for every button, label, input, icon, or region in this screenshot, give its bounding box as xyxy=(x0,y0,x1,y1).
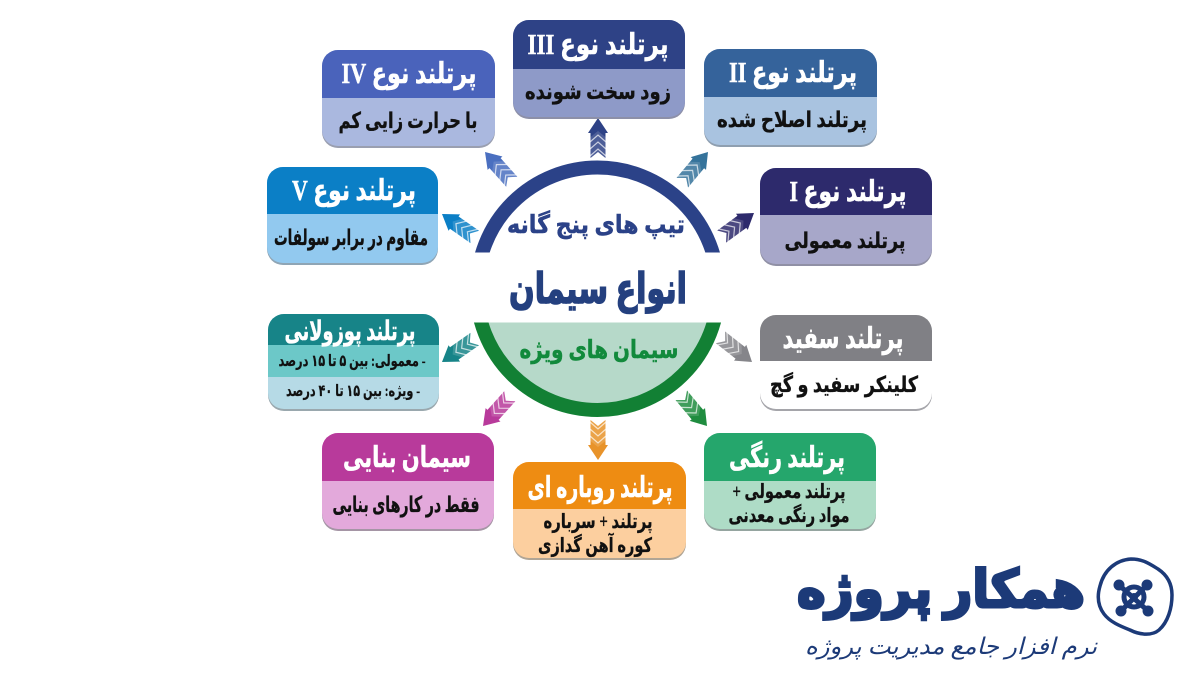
green half circle: special cements xyxy=(474,322,721,417)
panel: slag portland xyxy=(513,462,686,560)
panel: white portland: پرتلند سفید xyxy=(782,323,904,356)
logo name: همکار پروژه xyxy=(797,562,1085,620)
panel: slag portland: پرتلند + سرباره xyxy=(544,511,652,534)
panel: type IV: با حرارت زایی کم xyxy=(338,108,478,134)
panel: type IV: پرتلند نوع IV xyxy=(342,58,476,91)
arrow: to slag xyxy=(588,420,608,460)
panel: coloured portland: پرتلند معمولی + xyxy=(732,481,846,504)
arrow: to pozzolan xyxy=(436,331,481,370)
arrow: to coloured xyxy=(674,389,715,432)
panel: pozzolanic: - معمولی: بین ۵ تا ۱۵ درصد xyxy=(278,353,426,370)
panel: white portland: کلینکر سفید و گچ xyxy=(770,371,918,398)
arrow: to type IV xyxy=(478,145,519,188)
main title: انواع سیمان xyxy=(509,267,687,314)
panel: type III xyxy=(513,20,685,119)
panel: type III: پرتلند نوع III xyxy=(528,29,668,62)
panel: coloured portland: پرتلند رنگی xyxy=(729,440,845,475)
heading: special cements: سیمان های ویژه xyxy=(520,337,678,365)
panel: type V: پرتلند نوع V xyxy=(292,175,416,208)
logo: brand xyxy=(797,559,1172,660)
panel: coloured portland xyxy=(704,433,876,531)
panel: masonry cement: فقط در کارهای بنایی xyxy=(332,492,480,517)
panel: type II: پرتلند نوع II xyxy=(729,57,857,90)
blue arc: five types xyxy=(475,160,720,252)
logo tagline: نرم افزار جامع مدیریت پروژه xyxy=(805,634,1099,660)
panel: slag portland: کوره آهن گدازی xyxy=(538,532,652,557)
panel: type III: زود سخت شونده xyxy=(525,79,671,105)
panel: white portland xyxy=(760,315,932,411)
panel: type IV xyxy=(322,50,495,148)
panel: type I: پرتلند نوع I xyxy=(790,176,906,209)
arrow: to type II xyxy=(675,146,716,189)
arrow: to white xyxy=(714,329,758,370)
panel: type V xyxy=(267,167,438,265)
panel: pozzolanic: - ویژه: بین ۱۵ تا ۴۰ درصد xyxy=(286,383,420,400)
panel: coloured portland: مواد رنگی معدنی xyxy=(728,503,850,527)
panel: type I: پرتلند معمولی xyxy=(784,228,906,254)
panel: masonry cement xyxy=(322,433,494,531)
panel: pozzolanic xyxy=(268,314,439,411)
panel: pozzolanic: پرتلند پوزولانی xyxy=(284,316,416,347)
panel: slag portland: پرتلند روباره ای xyxy=(528,472,672,505)
arrow: to type I xyxy=(716,205,760,245)
panel: type V: مقاوم در برابر سولفات xyxy=(274,225,428,251)
arrow: to type III xyxy=(588,118,608,158)
heading: five types: تیپ های پنج گانه xyxy=(507,210,685,240)
panel: type II: پرتلند اصلاح شده xyxy=(717,107,867,133)
icon: logo mark xyxy=(1098,559,1172,634)
arrow: to type V xyxy=(436,206,481,245)
arrow: to masonry xyxy=(476,390,517,433)
panel: type II xyxy=(704,49,877,147)
panel: masonry cement: سیمان بنایی xyxy=(343,442,471,474)
panel: type I xyxy=(760,168,932,266)
